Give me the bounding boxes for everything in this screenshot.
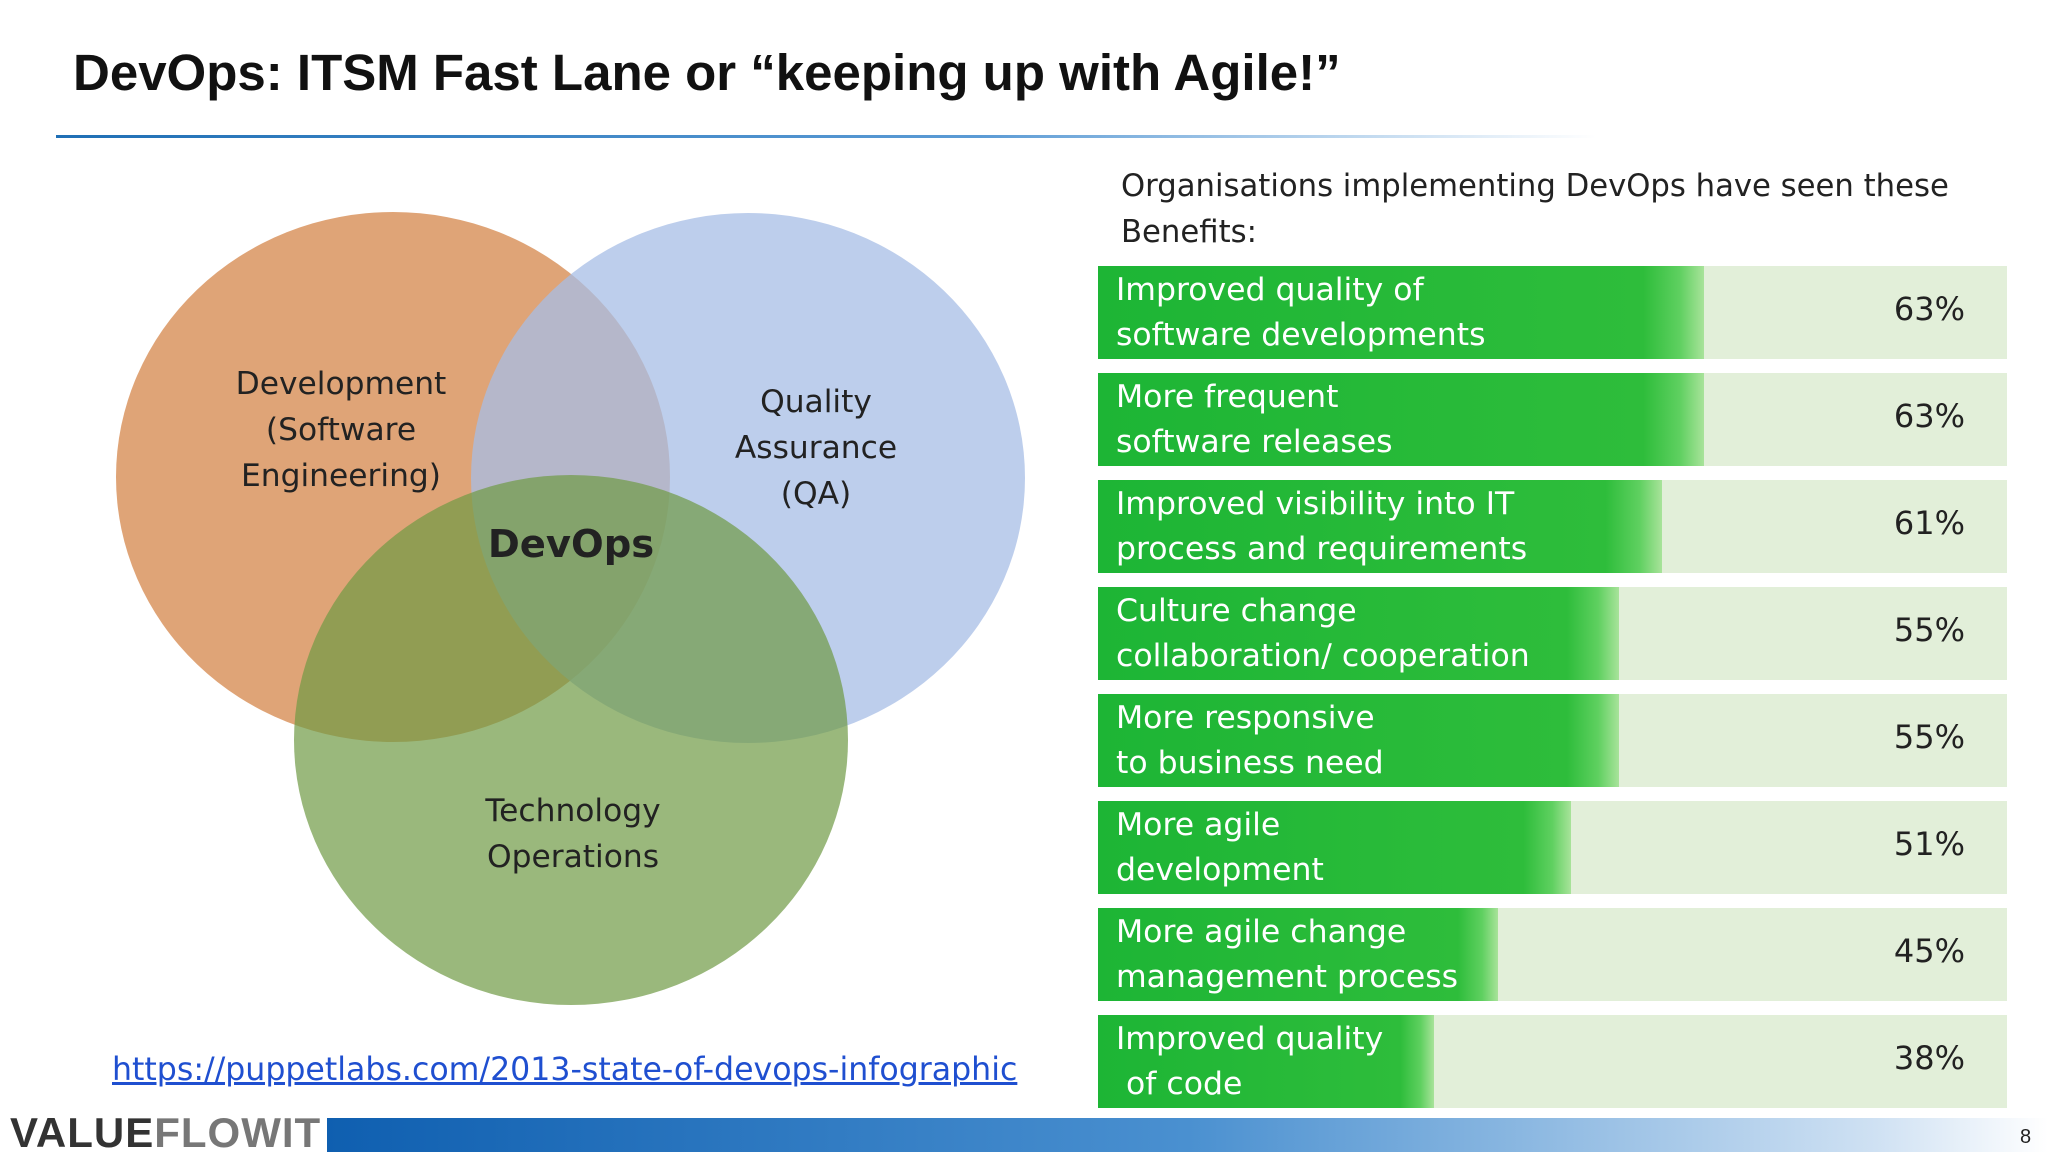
bar 8 <box>1098 1015 2007 1108</box>
bar 4: collaboration/ cooperation <box>1116 638 1530 674</box>
source link: https://puppetlabs.com/2013-state-of-devops-infographic <box>112 1052 1017 1088</box>
bar 8: Improved quality <box>1116 1021 1383 1057</box>
bar 6 <box>1098 801 2007 894</box>
bar 5: 55% <box>1894 718 1965 756</box>
bar 4: Culture change <box>1116 593 1357 629</box>
label: DevOps: DevOps <box>488 522 654 567</box>
bar 1: software developments <box>1116 317 1486 353</box>
bar 3: Improved visibility into IT <box>1116 486 1514 522</box>
bar 6: 51% <box>1894 825 1965 863</box>
bar 1: 63% <box>1894 290 1965 328</box>
bar 2: 63% <box>1894 397 1965 435</box>
label: QA: Assurance <box>735 430 897 466</box>
bar 6: development <box>1116 852 1324 888</box>
bar 5 <box>1098 694 2007 787</box>
bar 2 <box>1098 373 2007 466</box>
label: operations: Technology <box>484 793 661 829</box>
bar 3: 61% <box>1894 504 1965 542</box>
page number: 8 <box>2020 1126 2031 1148</box>
benefits heading <box>1121 169 1949 250</box>
label: QA: (QA) <box>781 476 851 512</box>
bar 5: to business need <box>1116 745 1384 781</box>
bar 8: 38% <box>1894 1039 1965 1077</box>
bar 3 <box>1098 480 2007 573</box>
footer bar <box>327 1118 2048 1152</box>
bar 7: More agile change <box>1116 914 1406 950</box>
label: QA: Quality <box>760 384 872 420</box>
bar 6: More agile <box>1116 807 1280 843</box>
bar 7 <box>1098 908 2007 1001</box>
label: development: Development <box>236 366 446 402</box>
label: operations: Operations <box>487 839 659 875</box>
title: DevOps: ITSM Fast Lane or “keeping up with Agile!” <box>73 44 1341 101</box>
label: development: (Software <box>266 412 416 448</box>
bar 2: More frequent <box>1116 379 1338 415</box>
bar 3: process and requirements <box>1116 531 1527 567</box>
bar 8: of code <box>1126 1066 1242 1102</box>
bar 4 <box>1098 587 2007 680</box>
bar 2: software releases <box>1116 424 1393 460</box>
circle: operations <box>294 475 848 1005</box>
circle: development <box>116 212 670 742</box>
benefits heading: Benefits: <box>1121 215 1257 250</box>
bar 1 <box>1098 266 2007 359</box>
logo: VALUEFLOWIT <box>10 1109 321 1156</box>
circle: QA <box>471 213 1025 743</box>
venn diagram <box>116 212 1025 1005</box>
label: development: Engineering) <box>241 458 441 494</box>
benefits heading: Organisations implementing DevOps have seen these <box>1121 169 1949 204</box>
bar 4: 55% <box>1894 611 1965 649</box>
bar 7: 45% <box>1894 932 1965 970</box>
bar 1: Improved quality of <box>1116 272 1424 308</box>
bar 5: More responsive <box>1116 700 1375 736</box>
bar 7: management process <box>1116 959 1458 995</box>
